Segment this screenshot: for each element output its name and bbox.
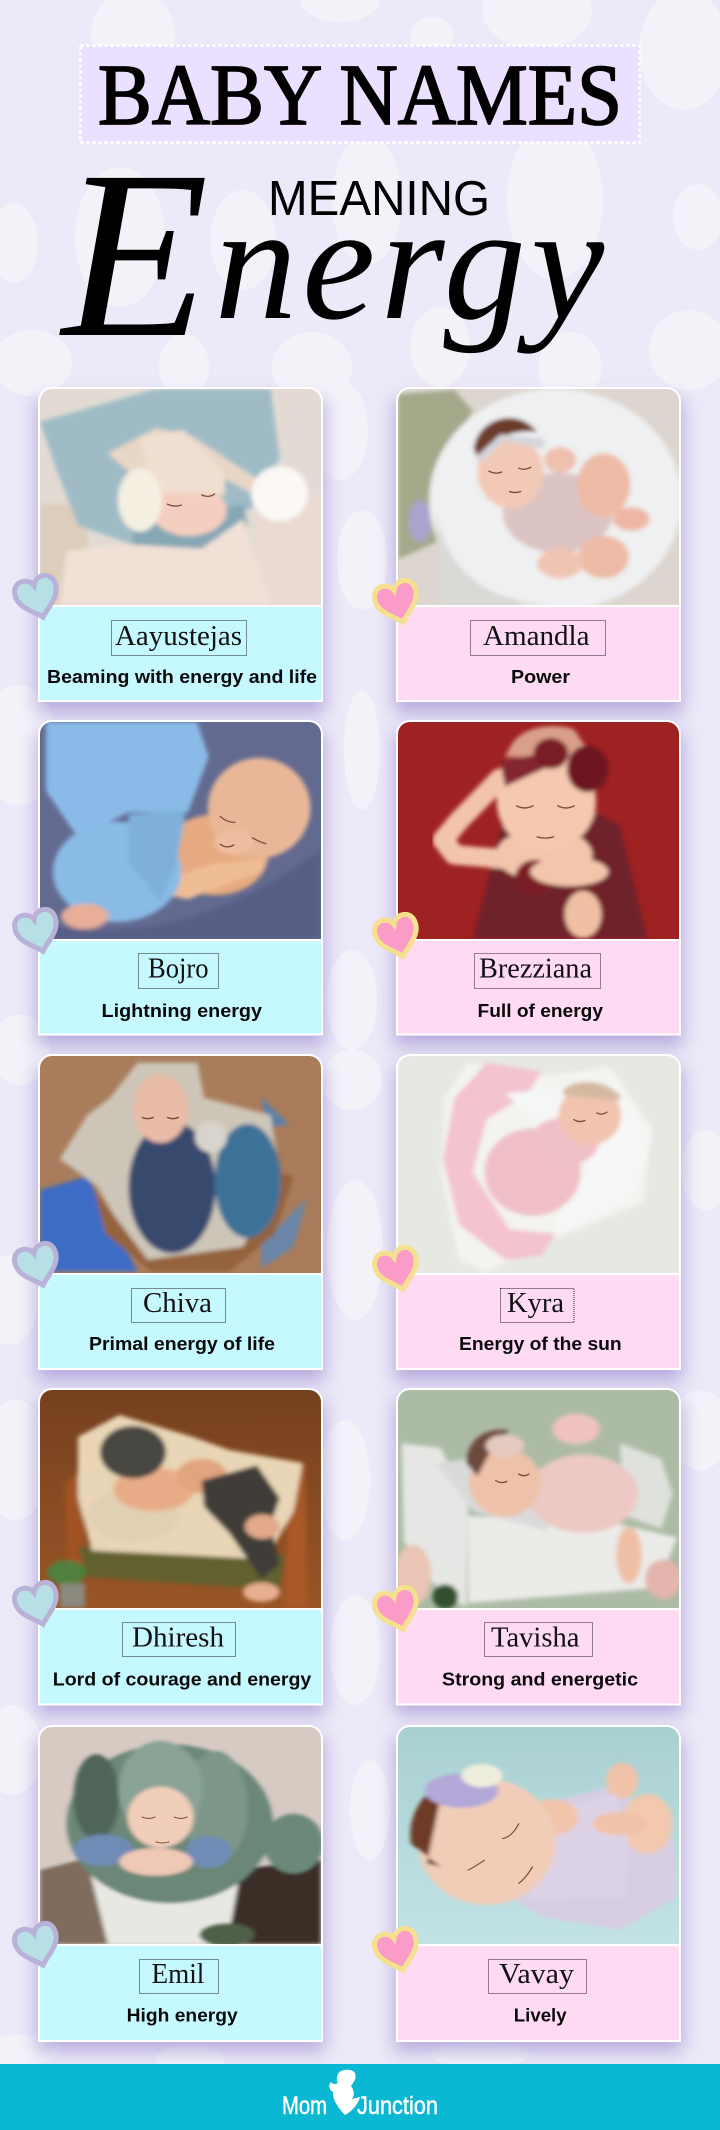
logo wordmark: Junction [357,2092,438,2120]
caption panel [40,1610,321,1704]
card: Tavisha [372,1388,683,1715]
title banner [80,46,640,143]
photo: baby in flat cap on wooden bed [40,1390,321,1608]
caption panel [40,1275,321,1368]
caption panel [398,1610,679,1704]
card: Dhiresh [12,1388,325,1715]
subtitle: MEANING: MEANING [268,172,490,226]
name box [488,1958,586,1994]
icon: heart [12,1580,63,1630]
photo: baby in pink on white crib [395,1390,682,1609]
icon: heart [12,907,63,957]
name: Kyra [507,1287,564,1319]
icon: heart [12,1921,63,1971]
title: BABY NAMES: BABY NAMES [98,46,622,143]
card: Vavay [372,1725,683,2052]
name box [112,620,246,656]
caption panel [40,1946,321,2040]
name box [132,1287,226,1322]
photo: baby in basket with blue wraps [40,1056,321,1273]
name: Emil [152,1958,204,1990]
description: Lightning energy [102,1000,263,1021]
card: Brezziana [372,720,683,1047]
photo: baby in lace on white fur [398,389,682,611]
caption panel [40,607,321,700]
icon: heart [372,1926,423,1976]
photo: baby in lilac wrap on teal [398,1727,679,1944]
description: High energy [127,2004,239,2026]
card: Emil [12,1725,325,2052]
caption panel [398,1275,679,1368]
card: Amandla [372,387,683,714]
description: Beaming with energy and life [47,666,317,687]
name box [484,1622,592,1656]
photo: baby in pink on heart bed [398,1056,679,1273]
photo: baby on red backdrop [398,722,679,939]
name box [474,952,600,988]
title script: Energy: nergy [215,171,609,354]
name: Dhiresh [132,1622,224,1654]
logo: MomJunction [282,2070,438,2120]
icon: heart [372,1245,423,1295]
name box [500,1287,574,1322]
photo: baby in cream hat on blue fur [40,389,321,605]
description: Lord of courage and energy [53,1668,312,1690]
name box [122,1622,236,1656]
icon: heart [12,1241,63,1291]
photo: baby in green bonnet in white bucket [40,1727,323,1946]
footer band [0,2064,720,2130]
name: Vavay [499,1958,575,1990]
name: Aayustejas [115,620,242,652]
description: Strong and energetic [442,1668,638,1690]
name: Brezziana [479,952,592,984]
icon: heart [372,578,423,628]
caption panel [398,941,679,1034]
card: Kyra [372,1054,683,1382]
card: Aayustejas [12,387,325,714]
name: Amandla [483,620,590,652]
description: Power [511,666,570,687]
caption panel [398,1946,679,2040]
description: Full of energy [478,1000,604,1021]
title script: Energy: E [59,121,209,387]
name box [470,620,606,656]
caption panel [40,941,321,1034]
icon: mother and baby [329,2070,360,2115]
icon: heart [372,912,423,962]
card: Bojro [12,720,325,1047]
name box [140,1958,218,1994]
photo: baby in blue wrap on slate blanket [40,722,321,939]
name: Chiva [143,1287,212,1319]
description: Lively [514,2004,567,2026]
logo wordmark: Mom [282,2092,327,2120]
name box [138,952,218,988]
name: Bojro [148,952,208,984]
description: Primal energy of life [89,1333,275,1354]
icon: heart [12,573,63,623]
card: Chiva [12,1054,325,1382]
icon: heart [372,1585,423,1635]
caption panel [398,607,679,700]
name: Tavisha [491,1622,580,1654]
description: Energy of the sun [459,1333,622,1354]
